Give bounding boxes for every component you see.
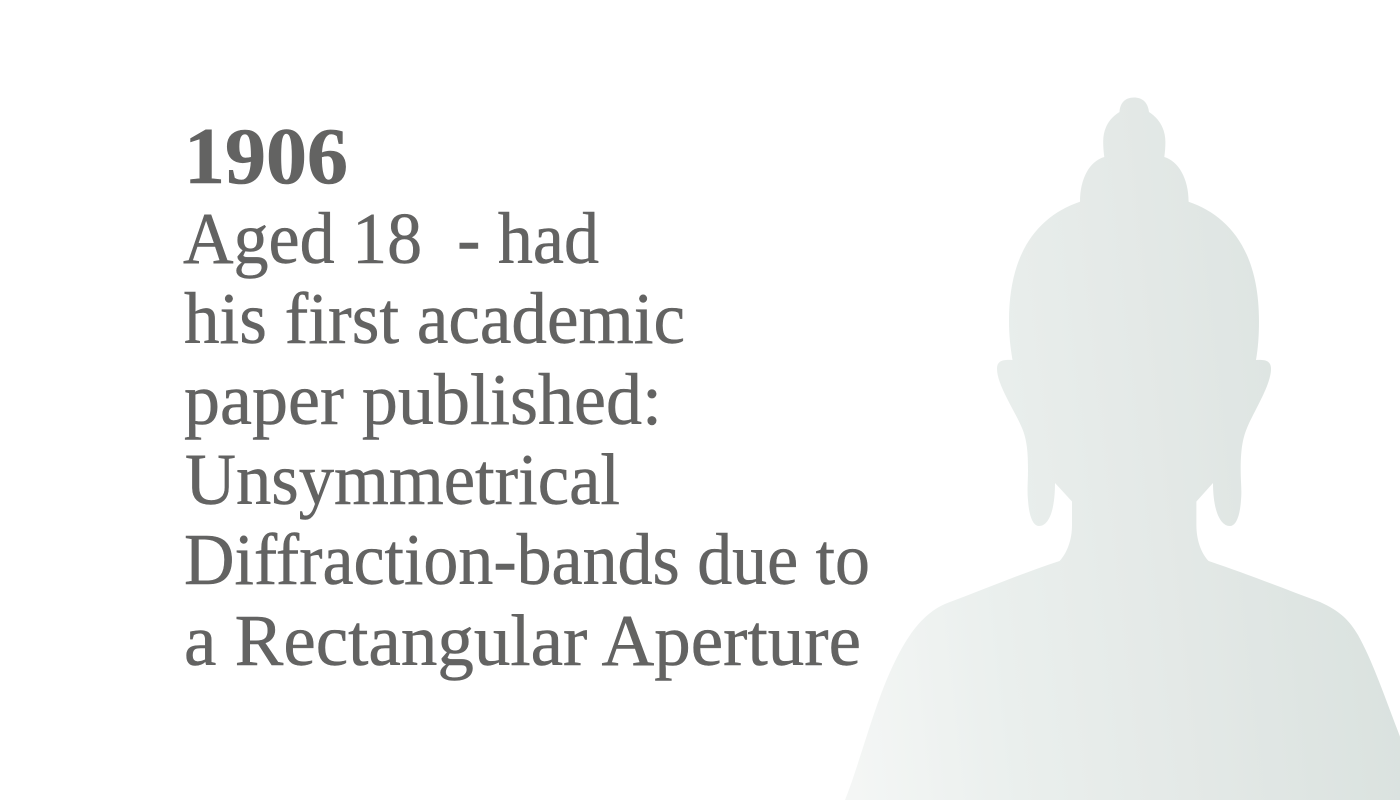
body text line 2: his first academic [184, 278, 685, 359]
text block: 1906 milestone [183, 113, 870, 681]
body text line 3: paper published: [184, 359, 662, 440]
body text line 4: Unsymmetrical [185, 439, 620, 520]
body text line 5: Diffraction-bands due to [184, 519, 870, 600]
body text line 1: Aged 18 - had [183, 198, 599, 279]
icon: Buddha silhouette [845, 98, 1400, 800]
heading: year: 1906 [184, 113, 348, 201]
body text line 6: a Rectangular Aperture [184, 600, 861, 681]
